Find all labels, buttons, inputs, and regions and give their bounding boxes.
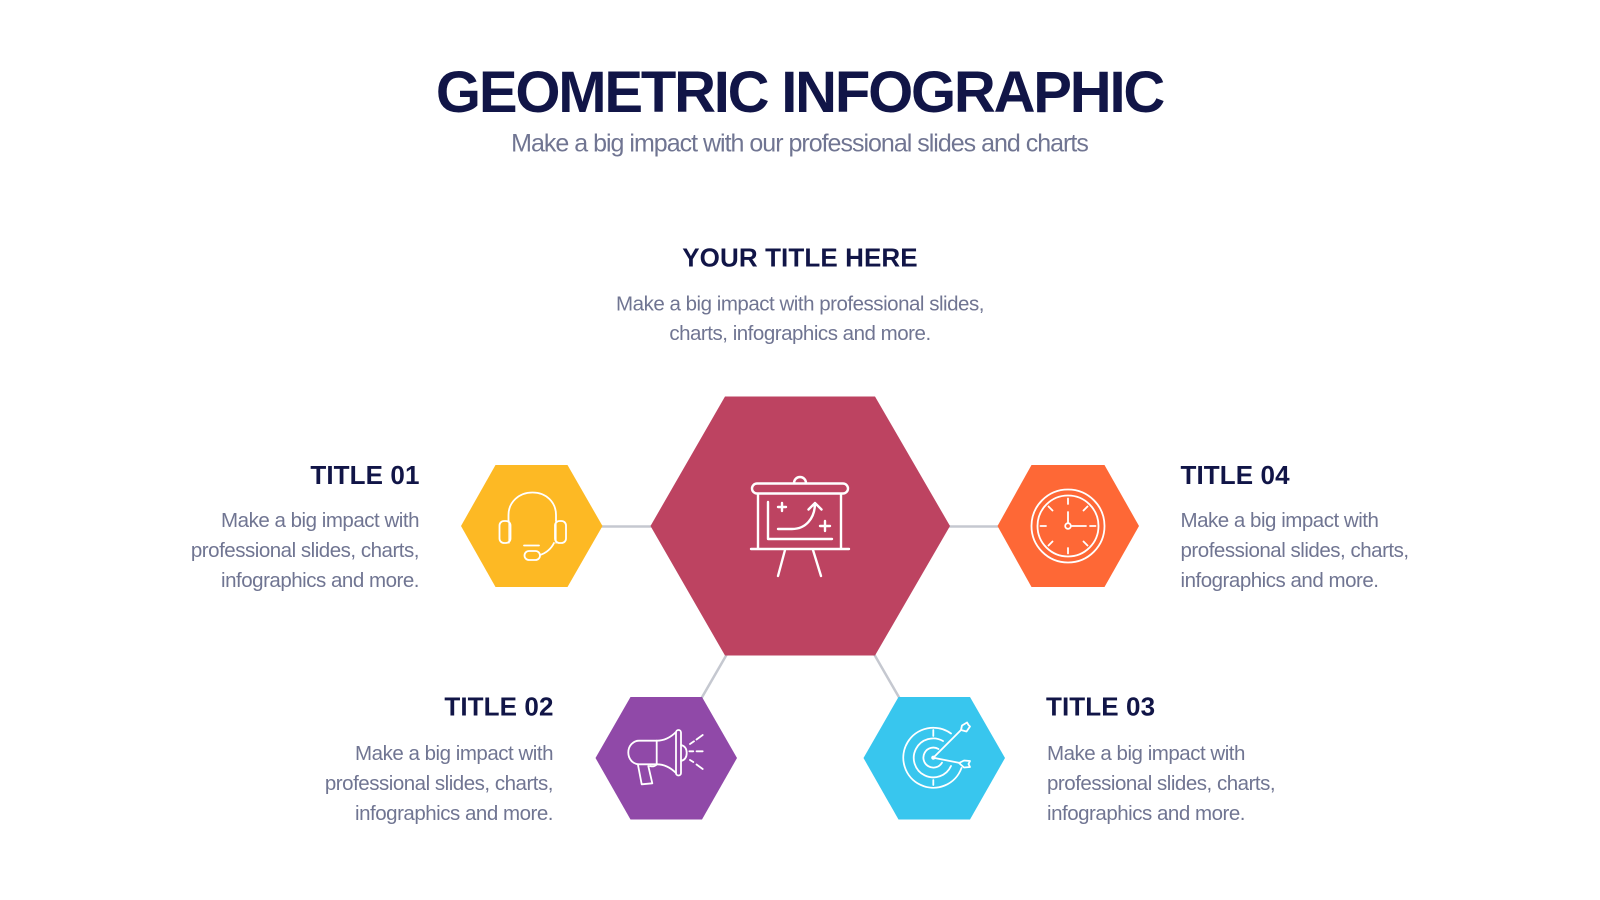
text: title 04: infographics and more.	[1180, 569, 1378, 592]
text: title 03: TITLE 03	[1046, 692, 1155, 722]
connectors	[600, 526, 1000, 699]
text: title 02: Make a big impact with	[355, 742, 553, 765]
hexagon: purple	[596, 697, 737, 820]
icon: target with arrows	[903, 722, 970, 788]
text: title 01: professional slides, charts,	[191, 539, 419, 562]
text: title 03	[1046, 692, 1275, 825]
central text block: YOUR TITLE HERE	[682, 242, 918, 272]
text: title 01: Make a big impact with	[221, 509, 419, 532]
central text block: Make a big impact with professional slides,	[616, 292, 984, 316]
icon: presentation board	[751, 477, 849, 576]
hexagon: orange	[998, 465, 1139, 587]
title: GEOMETRIC INFOGRAPHIC	[436, 60, 1164, 125]
central hexagon	[650, 396, 950, 656]
text: title 04: TITLE 04	[1180, 460, 1290, 490]
text: title 02	[325, 692, 554, 825]
text: title 04	[1180, 460, 1409, 592]
subtitle: Make a big impact with our professional slides and charts	[511, 130, 1088, 158]
text: title 03: infographics and more.	[1047, 802, 1245, 825]
icon: megaphone	[628, 730, 703, 784]
text: title 02: TITLE 02	[444, 692, 554, 722]
hexagon: blue	[864, 697, 1005, 820]
text: title 04: Make a big impact with	[1180, 509, 1379, 532]
central text block: charts, infographics and more.	[669, 322, 931, 345]
text: title 01: infographics and more.	[221, 569, 419, 592]
text: title 01: TITLE 01	[310, 460, 420, 490]
text: title 04: professional slides, charts,	[1180, 539, 1409, 562]
text: title 01	[191, 460, 420, 592]
hexagon: yellow	[461, 465, 602, 587]
text: title 02: infographics and more.	[355, 802, 553, 825]
icon: clock	[1032, 490, 1104, 562]
central text block	[616, 242, 984, 345]
text: title 03: Make a big impact with	[1047, 742, 1245, 765]
text: title 03: professional slides, charts,	[1047, 772, 1275, 795]
icon: headset	[500, 492, 566, 560]
text: title 02: professional slides, charts,	[325, 772, 553, 795]
